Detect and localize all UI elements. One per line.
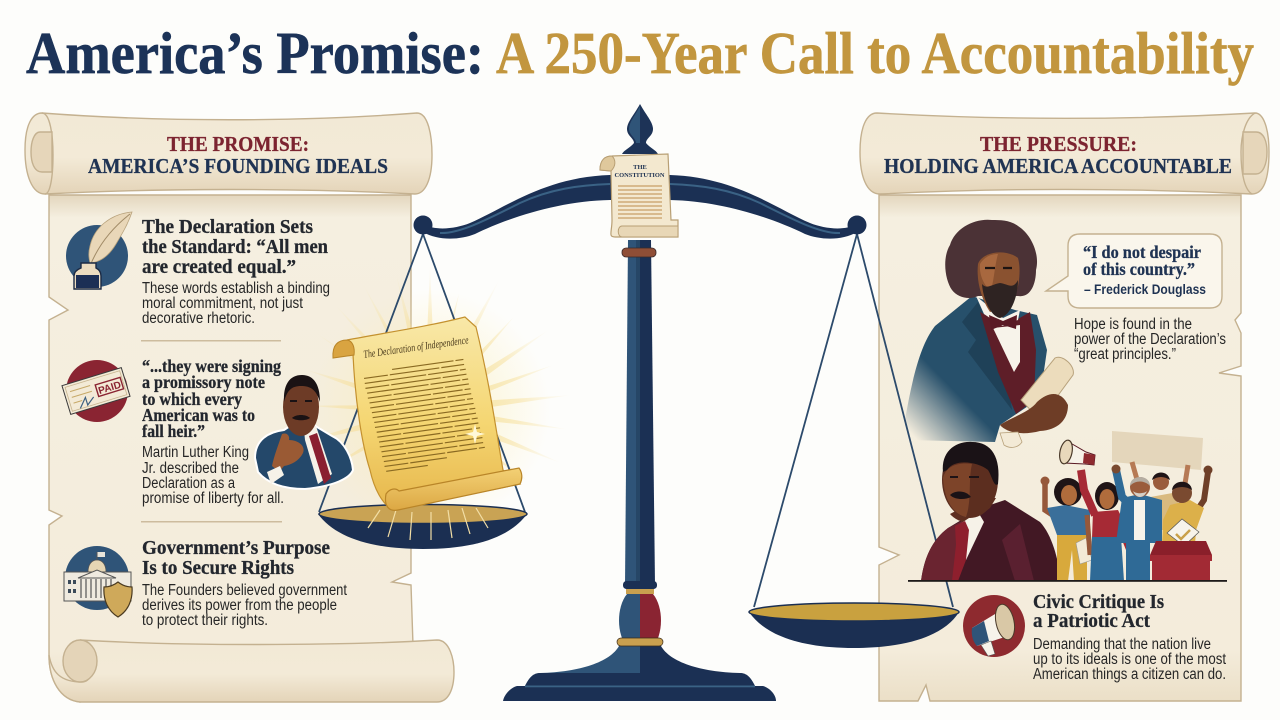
- scale: balance stand and beam: [318, 104, 959, 701]
- left pan: [318, 504, 527, 549]
- heading: the pressure: [884, 132, 1232, 178]
- scale strings: [319, 234, 953, 607]
- glow: sunburst behind Declaration: [298, 265, 570, 530]
- text: hope in great principles: Hope is found in the: [1074, 316, 1192, 333]
- collar: [622, 248, 656, 257]
- icon: capitol and shield: [64, 546, 132, 617]
- text: government's purpose: The Founders believed government: [142, 582, 348, 599]
- text: government's purpose: to protect their rights.: [142, 612, 268, 629]
- text: promissory note quote: promise of liberty for all.: [142, 490, 284, 507]
- panel background: left parchment scroll: [25, 113, 454, 702]
- text: civic critique: up to its ideals is one of the most: [1033, 651, 1227, 668]
- text: declaration sets the standard: These words establish a binding: [142, 280, 330, 297]
- person: back figure: [1132, 462, 1188, 530]
- person: older man in blue jacket: [1112, 464, 1162, 581]
- text: promissory note quote: “...they were signing: [142, 356, 281, 376]
- text: declaration sets the standard: [142, 216, 330, 327]
- illustration: protest crowd with ballot box: [908, 431, 1227, 582]
- heading: the promise: THE PROMISE:: [167, 132, 309, 156]
- text: government's purpose: derives its power from the people: [142, 597, 337, 614]
- callout: Douglass quote: [1046, 234, 1222, 308]
- callout: Douglass quote: – Frederick Douglass: [1084, 281, 1206, 297]
- text: declaration sets the standard: moral commitment, not just: [142, 295, 304, 312]
- illustration: Martin Luther King portrait: [921, 442, 1061, 581]
- base: [503, 581, 776, 701]
- panel background: right parchment scroll: [860, 113, 1269, 701]
- text: promissory note quote: fall heir.”: [142, 421, 205, 441]
- heading: the pressure: THE PRESSURE:: [980, 132, 1137, 156]
- icon: paid promissory note: [62, 360, 130, 422]
- text: government's purpose: [142, 537, 348, 629]
- text: promissory note quote: Martin Luther King: [142, 444, 249, 461]
- panel: the pressure: [884, 132, 1232, 683]
- finial: [622, 104, 658, 154]
- text: civic critique: [1033, 591, 1227, 683]
- illustration: Martin Luther King pointing: [255, 375, 353, 489]
- icon: crowd megaphone: [1058, 439, 1095, 465]
- text: declaration sets the standard: the Standard: “All men: [142, 236, 328, 258]
- constitution scroll: [600, 154, 678, 237]
- text: promissory note quote: American was to: [142, 405, 255, 425]
- text: hope in great principles: power of the Declaration’s: [1074, 331, 1226, 348]
- constitution scroll: CONSTITUTION: [614, 172, 665, 179]
- illustration: Frederick Douglass: [905, 220, 1073, 447]
- text: hope in great principles: “great principles.”: [1074, 346, 1176, 363]
- person: woman with afro: [1040, 476, 1092, 581]
- icon: quill and inkwell: [66, 212, 132, 289]
- right pan: [749, 603, 959, 648]
- heading: the pressure: HOLDING AMERICA ACCOUNTABLE: [884, 154, 1232, 178]
- text: declaration sets the standard: are created equal.”: [142, 256, 296, 278]
- text: promissory note quote: a promissory note: [142, 372, 265, 392]
- text: civic critique: American things a citizen can do.: [1033, 666, 1226, 683]
- constitution scroll: THE: [633, 164, 647, 171]
- text: hope in great principles: [1074, 316, 1226, 363]
- icon: megaphone in red circle: [963, 595, 1025, 657]
- heading: the promise: AMERICA’S FOUNDING IDEALS: [88, 154, 388, 178]
- title: [26, 20, 1254, 86]
- text: government's purpose: Government’s Purpose: [142, 537, 330, 559]
- icon: paid promissory note: PAID: [97, 380, 123, 397]
- text: promissory note quote: [142, 356, 284, 507]
- text: declaration sets the standard: The Declaration Sets: [142, 216, 313, 238]
- person: woman in red: [1081, 470, 1128, 581]
- callout: Douglass quote: of this country.”: [1083, 259, 1195, 279]
- callout: Douglass quote: “I do not despair: [1083, 242, 1201, 262]
- illustration: golden Declaration of Independence: [333, 317, 522, 510]
- text: government's purpose: Is to Secure Rights: [142, 557, 294, 579]
- person: man in yellow shirt: [1162, 466, 1212, 545]
- heading: the promise: [88, 132, 388, 178]
- icon: ballot box: [1150, 519, 1212, 581]
- text: civic critique: Civic Critique Is: [1033, 591, 1164, 613]
- text: declaration sets the standard: decorative rhetoric.: [142, 310, 255, 327]
- beam: [414, 175, 866, 239]
- title: America’s Promise:: [26, 20, 484, 86]
- text: civic critique: Demanding that the nation live: [1033, 636, 1211, 653]
- banner: [1112, 431, 1203, 470]
- text: civic critique: a Patriotic Act: [1033, 610, 1150, 632]
- text: promissory note quote: to which every: [142, 389, 242, 409]
- text: promissory note quote: Declaration as a: [142, 475, 235, 492]
- panel: the promise: [62, 132, 388, 629]
- text: promissory note quote: Jr. described the: [142, 460, 239, 477]
- illustration: golden Declaration of Independence: The Declaration of Independence: [363, 334, 469, 361]
- pole: [625, 240, 655, 585]
